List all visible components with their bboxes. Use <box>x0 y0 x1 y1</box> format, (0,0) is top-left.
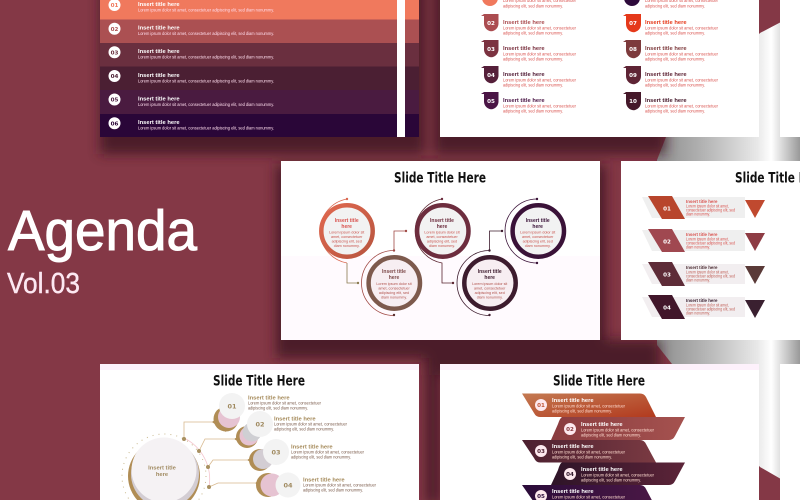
circle 3: amet, consectetuer <box>426 235 458 239</box>
step 04: 04 <box>283 482 293 490</box>
row 03: 03 <box>111 50 118 56</box>
ribbon 03: Lorem ipsum dolor sit amet, consectetuer <box>552 450 626 454</box>
step 03: adipiscing elit, sed diam nonummy. <box>291 454 351 460</box>
ribbon 05: Lorem ipsum dolor sit amet, consectetuer <box>552 494 626 500</box>
circle 4: adipiscing elit, sed <box>475 291 505 295</box>
banner 04 <box>642 295 765 319</box>
circle 5: amet, consectetuer <box>522 235 554 239</box>
item 02: 02 <box>487 21 495 27</box>
banner 03: 03 <box>663 272 671 278</box>
item 04: 04 <box>487 73 495 79</box>
item 03: Insert title here <box>503 46 545 52</box>
slide shadows <box>100 0 666 500</box>
banner 01: Insert title here <box>686 199 718 204</box>
circle 1: adipiscing elit, sed <box>332 239 362 243</box>
connector nodes <box>182 437 211 489</box>
row 05: 05 <box>111 98 118 104</box>
step 01: adipiscing elit, sed diam nonummy. <box>248 406 308 410</box>
item 03 <box>481 40 577 62</box>
step 02: Lorem ipsum dolor sit amet, consectetuer <box>274 422 348 426</box>
row 01: 01 <box>111 3 118 9</box>
row 02: Insert title here <box>138 26 180 32</box>
circle 1: diam nonummy. <box>334 244 360 248</box>
ribbon 02 <box>551 417 685 440</box>
ribbon 04: Insert title here <box>581 467 623 473</box>
banner 01: consectetuer adipiscing elit, sed <box>686 208 735 212</box>
circle 3: here <box>437 224 447 230</box>
circle 4: Lorem ipsum dolor sit <box>472 282 507 286</box>
step 03: Insert title here <box>291 444 333 450</box>
ribbon 04: adipiscing elit, sed diam nonummy. <box>581 478 641 482</box>
banner 01: 01 <box>663 206 671 212</box>
step 03: 03 <box>271 448 281 456</box>
circle 4: amet, consectetuer <box>474 286 506 290</box>
row 06: Insert title here <box>138 120 180 126</box>
item 03: adipiscing elit, sed diam nonummy. <box>503 56 563 62</box>
hub circle: Insert title <box>148 466 177 472</box>
item 10: 10 <box>629 99 637 105</box>
circle 1 <box>320 198 373 284</box>
step 04: adipiscing elit, sed diam nonummy. <box>303 488 363 492</box>
circle 2: Insert title <box>382 269 406 275</box>
circle 3: Insert title <box>430 218 454 224</box>
circle 5: diam nonummy. <box>525 244 551 248</box>
circle 4: here <box>484 275 495 281</box>
step 02: adipiscing elit, sed diam nonummy. <box>274 426 334 432</box>
item 08: Insert title here <box>645 46 687 52</box>
circle 2: Lorem ipsum dolor sit <box>376 282 412 286</box>
banner 04: diam nonummy. <box>686 310 710 316</box>
ribbon 04: Lorem ipsum dolor sit amet, consectetuer <box>581 472 655 478</box>
item 01: adipiscing elit, sed diam nonummy. <box>503 4 563 8</box>
banner 03: consectetuer adipiscing elit, sed <box>686 274 735 278</box>
item 07: 07 <box>629 21 637 27</box>
item 07: Insert title here <box>645 20 687 26</box>
item 05: Lorem ipsum dolor sit amet, consectetuer <box>503 104 577 108</box>
slide title: Slide Title Here <box>394 171 486 187</box>
panel: banner slide <box>621 161 800 340</box>
circle 2: adipiscing elit, sed <box>379 291 409 295</box>
item 06: adipiscing elit, sed diam nonummy. <box>645 4 705 8</box>
panel: hub slide <box>100 364 419 500</box>
banner 03 <box>642 262 765 286</box>
circle 1: Lorem ipsum dolor sit <box>329 230 364 234</box>
hub circle <box>128 438 200 500</box>
circle 5: adipiscing elit, sed <box>523 239 553 243</box>
ribbon 01 <box>522 394 656 417</box>
item 05: Insert title here <box>503 98 545 104</box>
ribbon 01: Insert title here <box>552 398 594 404</box>
banner 02: consectetuer adipiscing elit, sed <box>686 240 735 246</box>
step 04 <box>255 472 377 498</box>
hub circle: here <box>156 472 169 478</box>
banner 01: Lorem ipsum dolor sit amet, <box>686 204 729 208</box>
row 01: Insert title here <box>138 2 180 8</box>
item 09 <box>623 66 719 88</box>
banner 01 <box>642 196 765 219</box>
step 03: Lorem ipsum dolor sit amet, consectetuer <box>291 450 365 454</box>
hub dotted ring <box>122 434 206 500</box>
circle 1: amet, consectetuer <box>331 235 363 239</box>
ribbon 03: adipiscing elit, sed diam nonummy. <box>552 454 612 460</box>
ribbon 02: adipiscing elit, sed diam nonummy. <box>581 432 641 438</box>
circle 2 <box>362 230 420 316</box>
item 07: adipiscing elit, sed diam nonummy. <box>645 30 705 36</box>
item 09: 09 <box>629 73 637 79</box>
row 02: Lorem ipsum dolor sit amet, consectetuer adipiscing elit, sed diam nonummy. <box>138 31 274 36</box>
ribbon 05: Insert title here <box>552 489 594 495</box>
item 08: 08 <box>629 47 637 53</box>
circle 2: here <box>389 275 399 281</box>
item 01 <box>482 0 577 8</box>
slide title: Slide Title Here <box>213 374 305 390</box>
item 04: Insert title here <box>503 72 545 78</box>
row 04 <box>108 70 274 83</box>
circle 5: Lorem ipsum dolor sit <box>520 230 555 234</box>
row 02 <box>108 23 274 36</box>
banner 04: 04 <box>663 306 671 312</box>
banner 02 <box>642 229 765 252</box>
slide title: Slide Title Here <box>553 374 645 390</box>
row 05: Insert title here <box>138 96 180 102</box>
circle 2: diam nonummy. <box>381 295 407 299</box>
item 02 <box>481 14 577 36</box>
banner 02: Insert title here <box>686 232 718 237</box>
item 10: adipiscing elit, sed diam nonummy. <box>645 108 705 114</box>
circle 1: here <box>341 224 352 230</box>
circle 3 <box>415 198 468 284</box>
circle 3: adipiscing elit, sed <box>427 239 457 243</box>
banner 02: Lorem ipsum dolor sit amet, <box>686 236 729 242</box>
circle 5 <box>505 198 564 264</box>
row 05 <box>108 94 274 107</box>
circle 1: Insert title <box>335 218 359 224</box>
item 09: Lorem ipsum dolor sit amet, consectetuer <box>645 78 719 82</box>
banner 01: diam nonummy. <box>686 212 710 216</box>
item 10: Insert title here <box>645 98 687 104</box>
ribbon 01: Lorem ipsum dolor sit amet, consectetuer <box>552 404 626 408</box>
panel: title block <box>7 199 197 300</box>
connector lines <box>184 422 255 487</box>
circle 3: diam nonummy. <box>429 244 455 248</box>
ribbon 04 <box>551 462 685 485</box>
banner 03: Lorem ipsum dolor sit amet, <box>686 270 729 274</box>
banner 04: Insert title here <box>686 298 718 303</box>
subheading: volume: Vol.03 <box>7 268 80 300</box>
panel: offscreen slide top right <box>780 0 800 137</box>
item 08: adipiscing elit, sed diam nonummy. <box>645 56 705 62</box>
item 04 <box>481 66 577 88</box>
step 01: Lorem ipsum dolor sit amet, consectetuer <box>248 400 322 406</box>
item 05 <box>481 92 577 114</box>
banner 04: consectetuer adipiscing elit, sed <box>686 306 735 312</box>
banner 02: 02 <box>663 240 671 246</box>
item 02: Lorem ipsum dolor sit amet, consectetuer <box>503 26 577 30</box>
step 02: 02 <box>255 420 265 428</box>
panel: ribbon stack slide <box>440 364 759 500</box>
row 04: 04 <box>111 74 118 80</box>
row 02: 02 <box>111 27 118 33</box>
step 02 <box>234 411 348 448</box>
row 06 <box>108 117 274 130</box>
item 06 <box>624 0 719 8</box>
row 06: 06 <box>111 122 118 128</box>
panel: offscreen slide bottom right <box>780 364 800 500</box>
item 09: Insert title here <box>645 72 687 78</box>
item 08: Lorem ipsum dolor sit amet, consectetuer <box>645 52 719 56</box>
item 02: Insert title here <box>503 20 545 26</box>
item 04: adipiscing elit, sed diam nonummy. <box>503 82 563 88</box>
item 08 <box>623 40 719 62</box>
item 10 <box>623 92 719 114</box>
row 06: Lorem ipsum dolor sit amet, consectetuer adipiscing elit, sed diam nonummy. <box>138 126 274 130</box>
step 01 <box>212 393 322 432</box>
item 09: adipiscing elit, sed diam nonummy. <box>645 82 705 88</box>
step 03 <box>247 439 365 471</box>
circle 4 <box>457 230 516 316</box>
ribbon 01: 01 <box>537 403 545 409</box>
ribbon 02: Insert title here <box>581 422 623 428</box>
ribbon 03 <box>522 440 656 462</box>
circle 2: amet, consectetuer <box>378 286 410 290</box>
row 05: Lorem ipsum dolor sit amet, consectetuer adipiscing elit, sed diam nonummy. <box>138 102 274 107</box>
ribbon 02: 02 <box>566 427 574 433</box>
row 04: Insert title here <box>138 73 180 79</box>
ribbon 05 <box>522 485 656 500</box>
item 05: adipiscing elit, sed diam nonummy. <box>503 108 563 114</box>
item 10: Lorem ipsum dolor sit amet, consectetuer <box>645 104 719 108</box>
step 01: Insert title here <box>248 396 290 402</box>
item 03: Lorem ipsum dolor sit amet, consectetuer <box>503 52 577 56</box>
item 04: Lorem ipsum dolor sit amet, consectetuer <box>503 78 577 82</box>
panel: ten item slide <box>440 0 759 137</box>
item 05: 05 <box>487 99 495 105</box>
item 07: Lorem ipsum dolor sit amet, consectetuer <box>645 26 719 30</box>
circle 5: here <box>532 224 543 230</box>
banner 04: Lorem ipsum dolor sit amet, <box>686 302 729 308</box>
banner 02: diam nonummy. <box>686 244 710 250</box>
row 01: Lorem ipsum dolor sit amet, consectetuer adipiscing elit, sed diam nonummy. <box>138 8 274 12</box>
item 02: adipiscing elit, sed diam nonummy. <box>503 30 563 36</box>
step 04: Lorem ipsum dolor sit amet, consectetuer <box>303 482 377 488</box>
item 07 <box>623 14 719 36</box>
banner 03: Insert title here <box>686 265 718 270</box>
row 03: Lorem ipsum dolor sit amet, consectetuer adipiscing elit, sed diam nonummy. <box>138 54 274 60</box>
ribbon 02: Lorem ipsum dolor sit amet, consectetuer <box>581 428 655 432</box>
ribbon 03: 03 <box>537 449 545 455</box>
ribbon 03: Insert title here <box>552 444 594 450</box>
banner 03: diam nonummy. <box>686 278 710 282</box>
step 01: 01 <box>227 402 237 410</box>
row 01 <box>108 0 274 12</box>
circle 3: Lorem ipsum dolor sit <box>424 230 460 234</box>
ribbon 01: adipiscing elit, sed diam nonummy. <box>552 408 612 414</box>
panel: circles slide <box>281 161 600 340</box>
ribbon 04: 04 <box>566 472 574 478</box>
step 04: Insert title here <box>303 478 345 484</box>
circle 4: Insert title <box>478 269 502 275</box>
grey ribbon shape <box>657 12 800 490</box>
row 03 <box>108 46 274 60</box>
heading: Agenda: Agenda <box>8 199 197 263</box>
row 03: Insert title here <box>138 49 180 55</box>
panel: list slide <box>100 0 419 137</box>
row 04: Lorem ipsum dolor sit amet, consectetuer adipiscing elit, sed diam nonummy. <box>138 78 274 83</box>
circle 4: diam nonummy. <box>477 295 503 299</box>
step 02: Insert title here <box>274 416 316 422</box>
circle 5: Insert title <box>526 218 550 224</box>
item 03: 03 <box>487 47 495 53</box>
